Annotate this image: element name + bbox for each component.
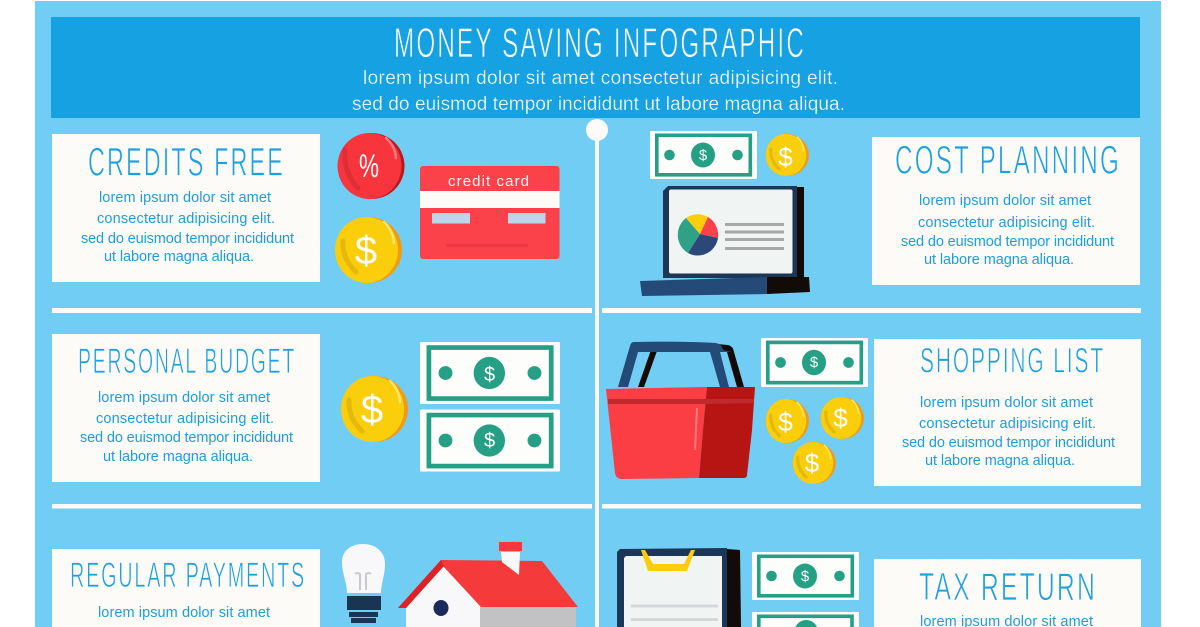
icon: percent coin — [338, 133, 404, 199]
header subtitle — [352, 68, 845, 115]
central timeline — [586, 119, 608, 627]
text block: cost planning: consectetur adipisicing elit. — [918, 215, 1095, 231]
text block: cost planning: ut labore magna aliqua. — [924, 252, 1074, 268]
heading: regular payments: REGULAR PAYMENTS — [70, 556, 306, 595]
icon: laptop with pie chart — [640, 186, 810, 296]
icon: dollar coin personal budget — [341, 376, 408, 442]
panel: personal budget — [52, 334, 320, 482]
heading: credits free: CREDITS FREE — [88, 140, 285, 184]
text block: shopping list: lorem ipsum dolor sit amet — [920, 395, 1093, 411]
icon: banknote tax return bottom — [752, 612, 859, 627]
icon: dollar coin — [335, 217, 402, 283]
text block: shopping list: sed do euismod tempor incididunt — [902, 435, 1115, 451]
text block: shopping list — [902, 395, 1115, 469]
text block: credits free: ut labore magna aliqua. — [104, 249, 254, 265]
icon: coin shopping left: $ — [778, 407, 793, 437]
pie chart — [678, 214, 718, 256]
text block: personal budget: sed do euismod tempor incididunt — [80, 430, 293, 446]
icon: clipboard — [617, 548, 741, 627]
icon: banknote shopping list — [761, 338, 868, 387]
icon: banknote personal budget top: $ — [484, 364, 495, 386]
text block: credits free: consectetur adipisicing elit. — [97, 211, 275, 227]
text block: regular payments: lorem ipsum dolor sit amet — [98, 605, 270, 621]
icon: shopping basket — [606, 342, 755, 479]
icon: banknote shopping list: $ — [810, 354, 819, 371]
icon: banknote personal budget bottom: $ — [484, 430, 495, 452]
icon: credit card: credit card — [448, 173, 529, 190]
icon: banknote personal budget top — [420, 342, 560, 404]
icon: coin shopping right: $ — [833, 403, 848, 433]
text block: credits free: sed do euismod tempor incididunt — [81, 231, 294, 247]
icon: coin cost planning: $ — [778, 142, 793, 172]
text block: shopping list: ut labore magna aliqua. — [925, 453, 1075, 469]
icon: banknote tax return top: $ — [801, 568, 810, 585]
panel: shopping list — [874, 339, 1141, 486]
header subtitle: lorem ipsum dolor sit amet consectetur adipisicing elit. — [363, 68, 838, 89]
text block: cost planning — [901, 193, 1114, 268]
header banner — [51, 17, 1140, 118]
heading: tax return: TAX RETURN — [919, 566, 1097, 609]
icon: banknote personal budget bottom — [420, 410, 560, 472]
text block: credits free: lorem ipsum dolor sit amet — [99, 190, 271, 206]
panel: tax return — [874, 559, 1141, 627]
panel: cost planning — [872, 137, 1140, 285]
text block: cost planning: lorem ipsum dolor sit amet — [919, 193, 1091, 209]
main title: MONEY SAVING INFOGRAPHIC — [394, 19, 806, 66]
icon: percent coin: % — [359, 148, 379, 184]
heading: personal budget: PERSONAL BUDGET — [78, 342, 296, 381]
icon: coin shopping bottom: $ — [805, 448, 820, 478]
panel: credits free — [52, 134, 320, 282]
panel: regular payments — [52, 549, 320, 627]
icon: credit card — [420, 166, 560, 259]
text block: personal budget: lorem ipsum dolor sit amet — [98, 390, 270, 406]
text block: personal budget: ut labore magna aliqua. — [103, 449, 253, 465]
text block: personal budget — [80, 390, 293, 465]
text block: shopping list: consectetur adipisicing elit. — [919, 416, 1096, 432]
text block: cost planning: sed do euismod tempor incididunt — [901, 234, 1114, 250]
text block: credits free — [81, 190, 294, 265]
icon: dollar coin: $ — [355, 229, 377, 273]
icon: coin shopping right — [821, 397, 864, 439]
icon: coin shopping left — [766, 399, 809, 443]
text block: personal budget: consectetur adipisicing elit. — [96, 411, 274, 427]
icon: light bulb — [342, 544, 385, 623]
icon: banknote cost planning: $ — [699, 147, 708, 164]
header subtitle: sed do euismod tempor incididunt ut labore magna aliqua. — [352, 94, 845, 115]
icon: banknote tax return top — [752, 552, 859, 600]
icon: dollar coin personal budget: $ — [361, 388, 383, 432]
icon: house — [398, 542, 578, 627]
icon: coin cost planning — [766, 134, 809, 176]
icon: coin shopping bottom — [793, 442, 836, 484]
icon: banknote cost planning — [650, 131, 757, 179]
